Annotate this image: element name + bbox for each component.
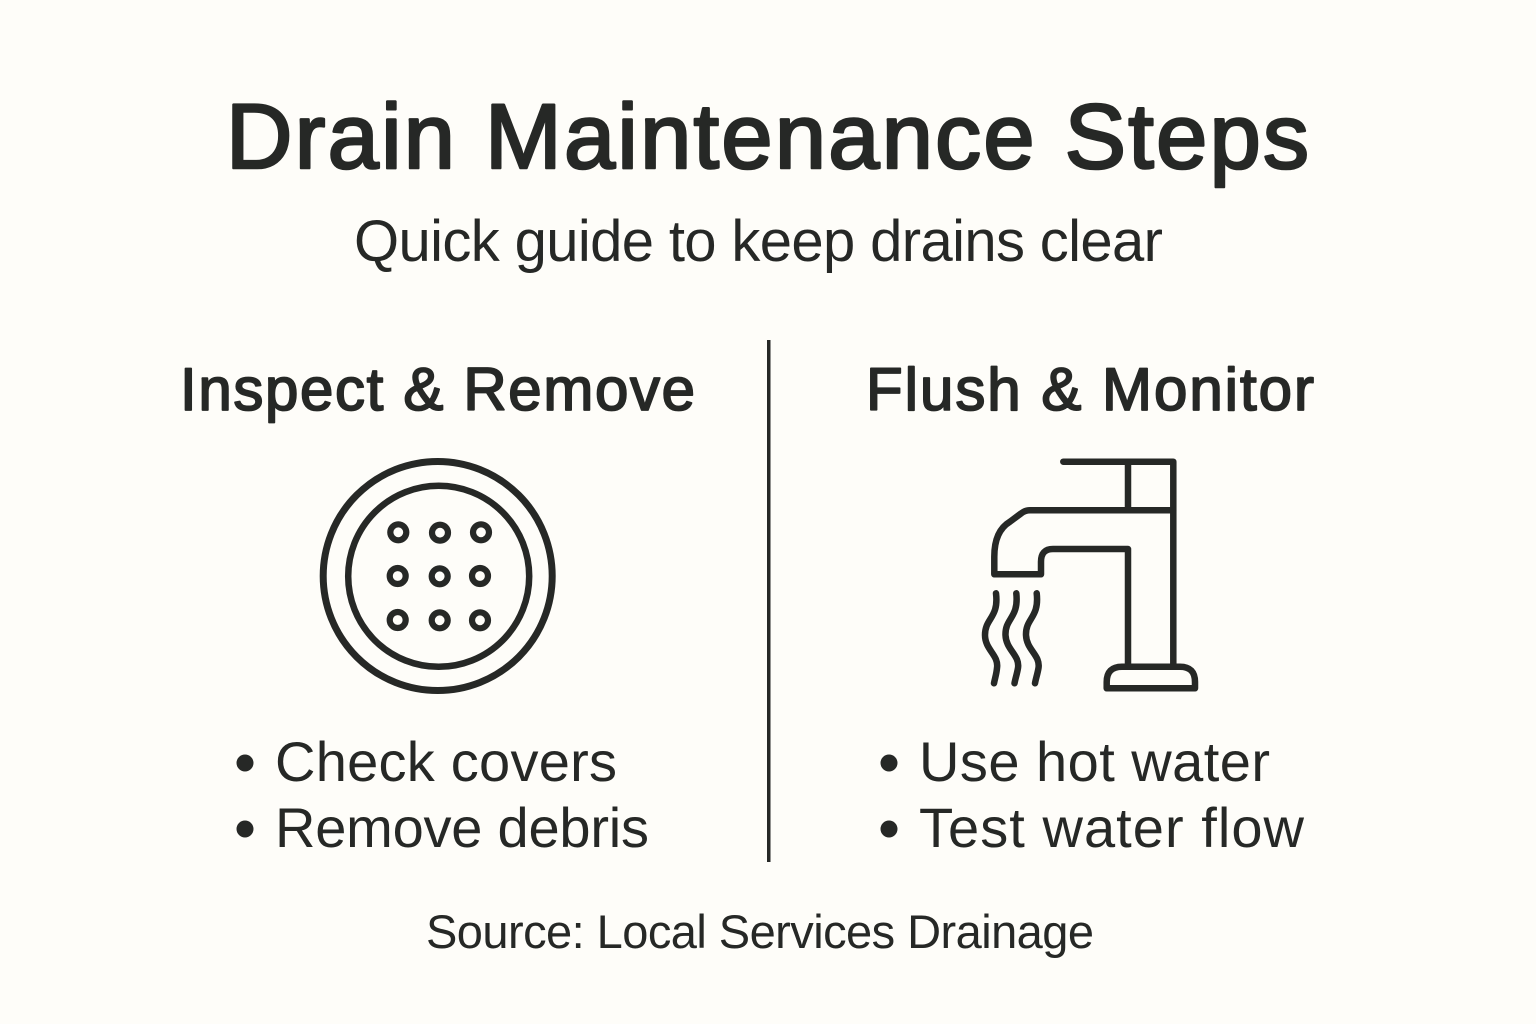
panel: flush and monitor: [866, 356, 1314, 859]
heading: inspect and remove: Inspect & Remove: [180, 356, 695, 423]
bullet list: inspect and remove: Check covers: [275, 730, 617, 793]
bullet list: flush and monitor: Use hot water: [919, 730, 1270, 793]
title: Drain Maintenance Steps: [226, 86, 1309, 188]
icon: faucet with running water: [985, 462, 1195, 688]
heading: flush and monitor: Flush & Monitor: [866, 356, 1314, 423]
panel: inspect and remove: [180, 356, 695, 859]
subtitle: Quick guide to keep drains clear: [354, 209, 1163, 274]
bullet list: inspect and remove: Remove debris: [275, 796, 649, 859]
source note: Source: Local Services Drainage: [426, 905, 1094, 958]
bullet list: flush and monitor: [880, 730, 1305, 859]
bullet list: flush and monitor: Test water flow: [919, 796, 1305, 859]
center divider: [767, 340, 770, 862]
bullet list: inspect and remove: [236, 730, 649, 859]
icon: drain cover: [323, 462, 552, 690]
